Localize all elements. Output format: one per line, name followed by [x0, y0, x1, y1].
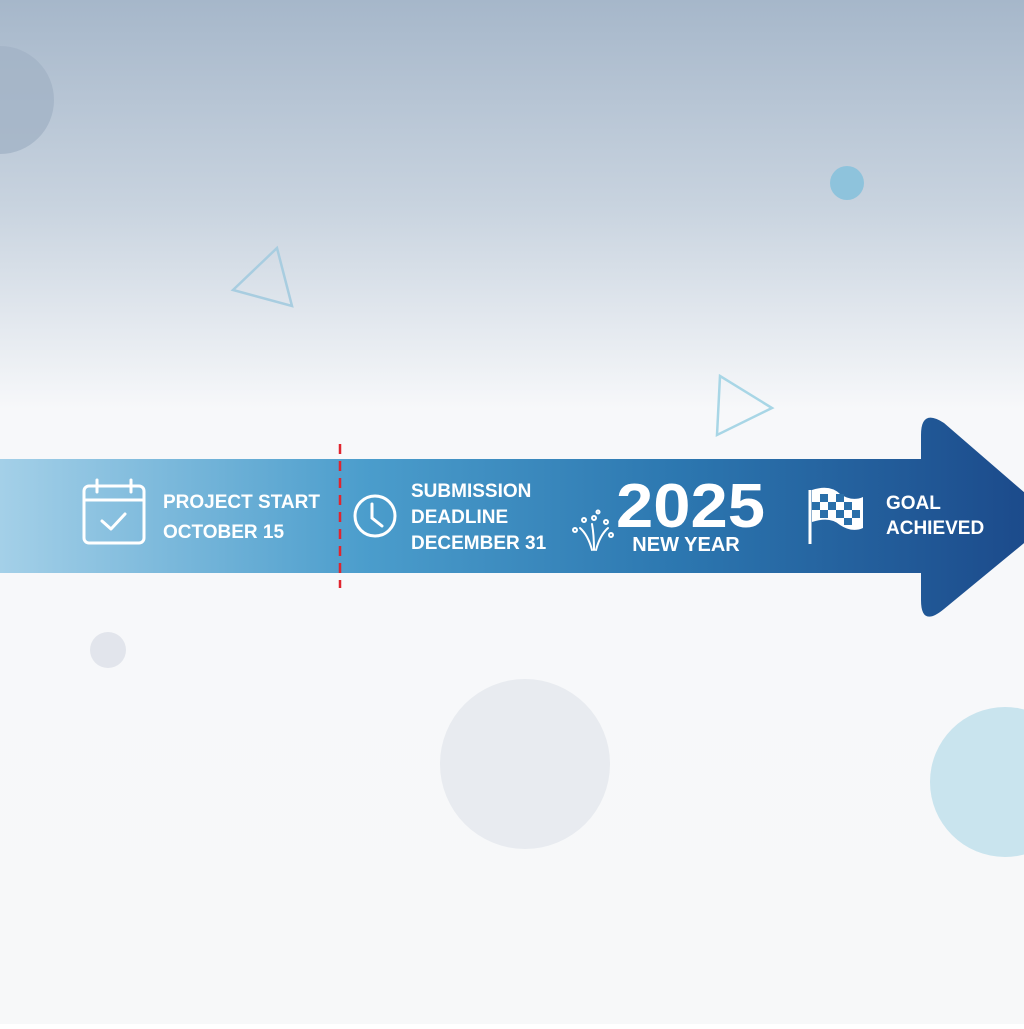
icon: checkered flag [810, 488, 863, 544]
milestone: submission deadline [355, 481, 547, 554]
milestone: submission deadline: DECEMBER 31 [411, 533, 547, 554]
decorative circle small gray [90, 632, 126, 668]
text: submission deadline: SUBMISSION [411, 481, 531, 502]
decorative circle top-right [830, 166, 864, 200]
milestone: 2025 new year [573, 472, 765, 556]
decorative circle top-left [0, 46, 54, 154]
decorative circle large gray [440, 679, 610, 849]
icon: clock [355, 496, 395, 536]
milestone: project start [84, 480, 320, 543]
red dashed divider [339, 444, 341, 588]
milestone: project start: OCTOBER 15 [163, 522, 285, 543]
text: 2025: 2025 [616, 472, 765, 541]
text: goal achieved: GOAL [886, 493, 941, 514]
text: project start: PROJECT START [163, 492, 320, 513]
text: new year: NEW YEAR [632, 534, 740, 556]
timeline arrow [0, 418, 1024, 617]
milestone: goal achieved [810, 488, 984, 544]
decorative circle right teal [930, 707, 1024, 857]
decorative triangle left [233, 248, 292, 306]
icon: fireworks [573, 510, 613, 550]
milestone: submission deadline: DEADLINE [411, 507, 508, 528]
milestone: goal achieved: ACHIEVED [886, 518, 984, 539]
decorative triangle right [717, 376, 772, 435]
icon: calendar [84, 480, 144, 543]
